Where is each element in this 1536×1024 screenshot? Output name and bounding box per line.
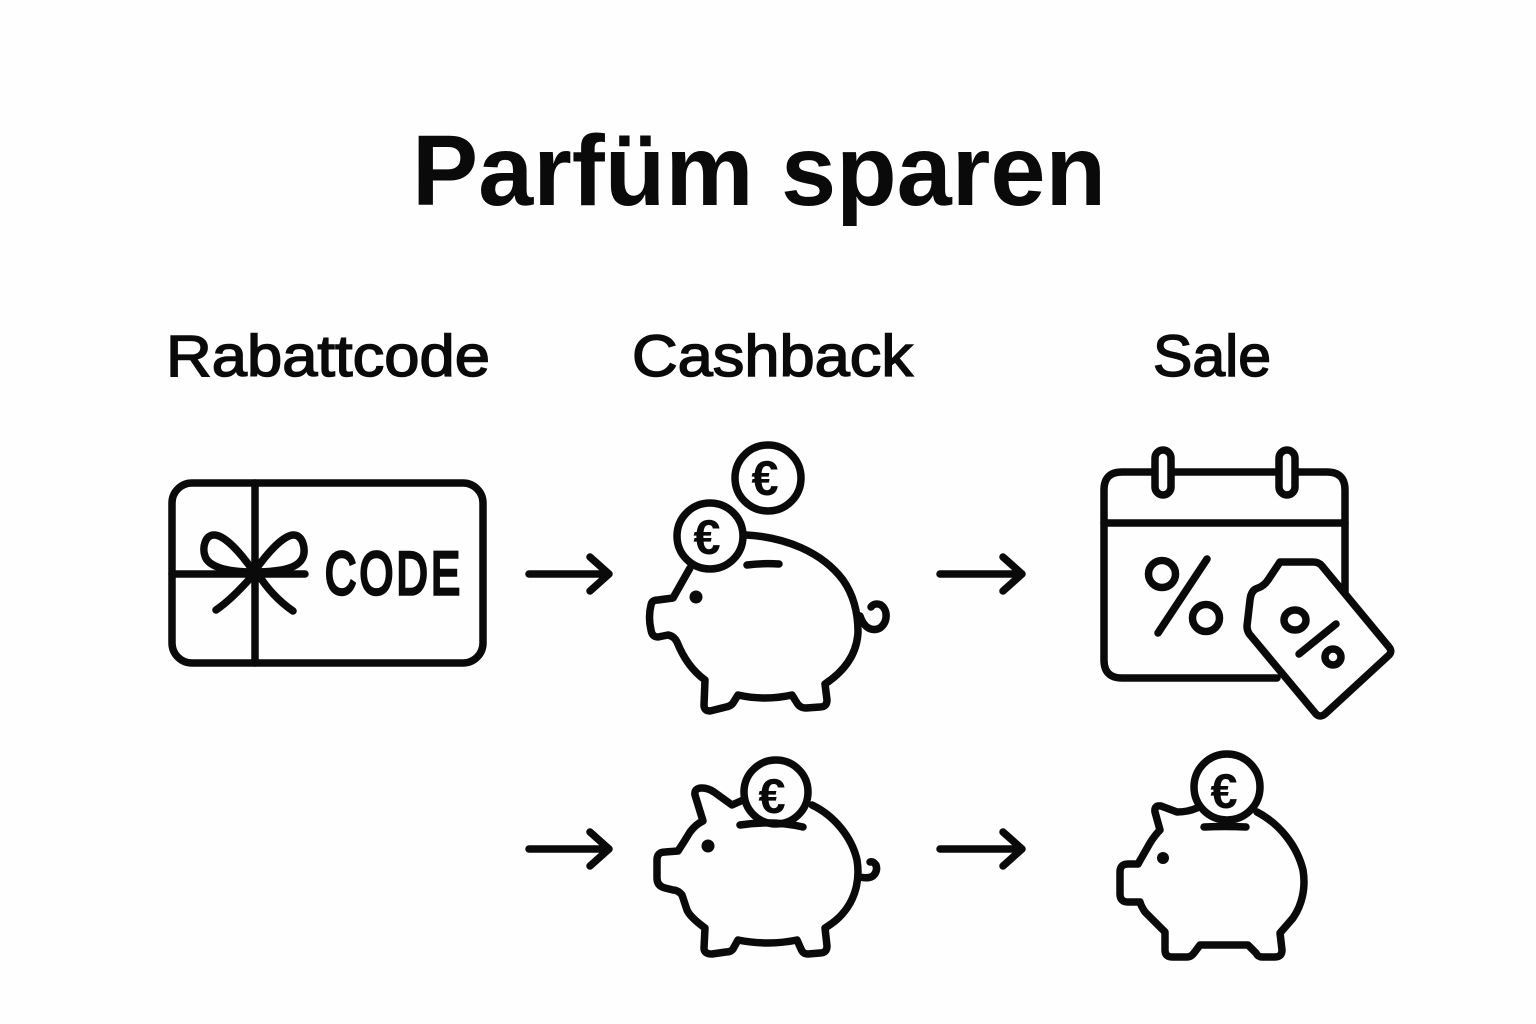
icon: piggy bank with coin, side view: € — [1210, 765, 1238, 819]
icon: piggy bank with coin in slot: € — [758, 770, 786, 824]
icon: piggy bank with coin in slot — [657, 760, 877, 954]
icon: piggy bank with two coins: € — [751, 452, 779, 506]
arrow: row 2 first — [529, 832, 609, 866]
title: Parfüm sparen — [412, 115, 1106, 227]
icon: piggy bank with coin, side view — [1120, 754, 1304, 957]
icon: piggy bank with two coins — [650, 445, 886, 711]
arrow: row 2 second — [940, 832, 1022, 866]
icon: gift card with code: CODE — [325, 541, 463, 608]
icon: calendar with percent and tag — [1104, 450, 1391, 716]
arrow: row 1 first — [529, 557, 609, 591]
heading: Sale: Sale — [1153, 324, 1271, 389]
arrow: row 1 second — [940, 557, 1022, 591]
icon: gift card with code — [172, 483, 483, 663]
heading: Rabattcode: Rabattcode — [166, 324, 490, 389]
heading: Cashback: Cashback — [632, 324, 914, 389]
icon: piggy bank with two coins: € — [693, 511, 721, 565]
